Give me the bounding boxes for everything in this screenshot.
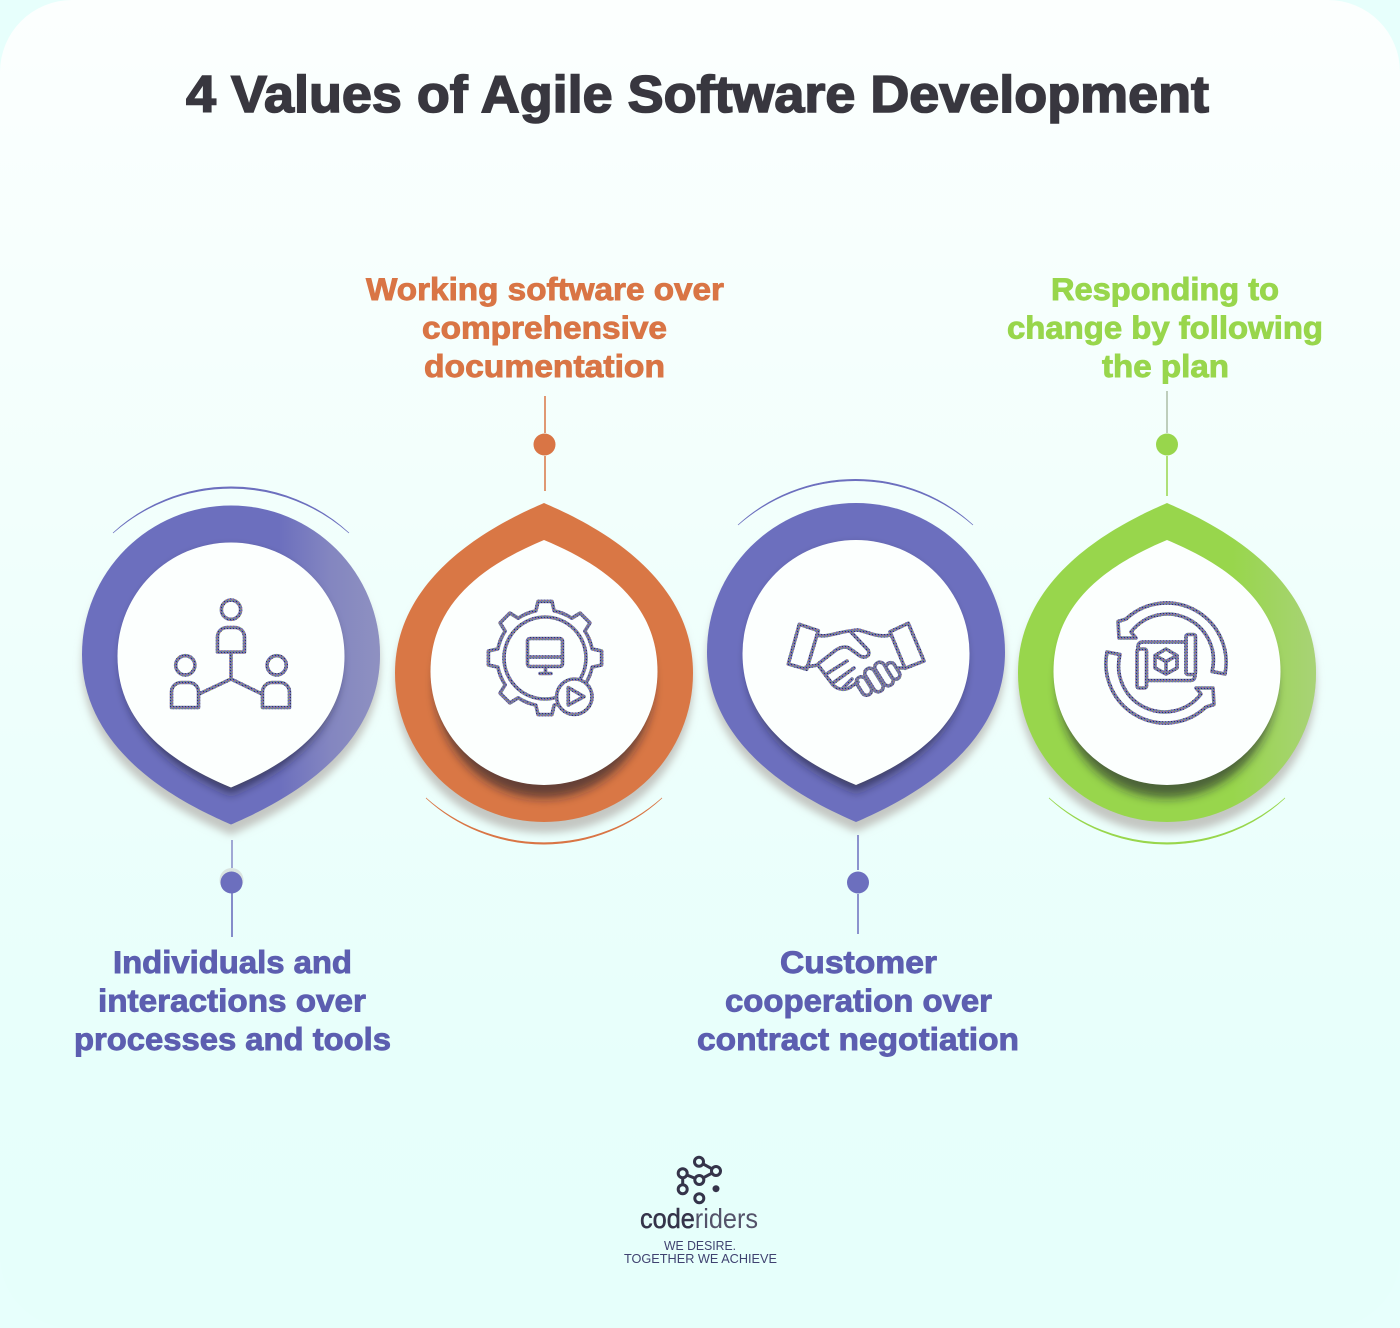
icon: people network	[172, 600, 290, 708]
label 2: comprehensive	[422, 310, 667, 346]
label 1: interactions over	[98, 982, 366, 1018]
label 3: cooperation over	[725, 982, 992, 1018]
white drop 3	[742, 540, 970, 785]
ring tint 4	[1018, 503, 1316, 822]
connector 2	[534, 396, 556, 491]
inner shadow 1	[122, 549, 340, 794]
logo mark	[678, 1157, 720, 1203]
label 2	[366, 271, 724, 384]
decorative arc above drop 3	[738, 479, 973, 525]
logo tagline: TOGETHER WE ACHIEVE	[624, 1252, 777, 1266]
label 1: processes and tools	[74, 1021, 391, 1057]
drop ring 4	[1018, 503, 1316, 822]
label 4	[1007, 271, 1323, 384]
inner shadow 4	[1051, 658, 1283, 805]
white drop 4	[1054, 540, 1280, 785]
title: 4 Values of Agile Software Development	[186, 66, 1209, 124]
panel: customer cooperation	[697, 479, 1019, 1057]
panel: responding to change	[1007, 271, 1323, 844]
drop shadow 3	[707, 513, 1005, 832]
decorative arc below drop 4	[1049, 798, 1285, 844]
label 2: documentation	[424, 348, 665, 384]
panel: individuals and interactions	[74, 487, 391, 1057]
label 1	[74, 944, 391, 1057]
connector 3	[847, 835, 869, 934]
drop ring 3	[707, 503, 1005, 822]
drop shadow 2	[395, 514, 693, 833]
connector 1	[220, 840, 244, 937]
logo tagline	[624, 1239, 777, 1266]
icon: handshake	[788, 623, 924, 697]
label 2: Working software over	[366, 271, 724, 307]
label 1: Individuals and	[113, 944, 352, 980]
connector 4	[1156, 391, 1178, 496]
drop shadow 1	[82, 516, 380, 835]
icon: cycle with blueprint and cube	[1106, 603, 1226, 723]
drop ring 1	[82, 506, 380, 824]
label 3: contract negotiation	[697, 1021, 1019, 1057]
label 3: Customer	[780, 944, 937, 980]
ring light tint 1	[82, 506, 380, 824]
panel: working software	[366, 271, 724, 844]
decorative arc below drop 2	[426, 798, 662, 844]
logo wordmark: coderiders	[640, 1203, 758, 1234]
label 3	[697, 944, 1019, 1057]
white drop 2	[430, 540, 658, 785]
drop shadow 4	[1018, 514, 1316, 833]
decorative arc above drop 1	[113, 487, 349, 533]
icon: gear with monitor and play	[488, 601, 602, 715]
inner shadow 2	[428, 655, 660, 806]
logo: coderiders	[624, 1157, 777, 1266]
label 4: Responding to	[1051, 271, 1279, 307]
white drop 1	[118, 543, 344, 788]
drop ring 2	[395, 503, 693, 822]
logo tagline: WE DESIRE.	[664, 1239, 736, 1253]
label 4: change by following	[1007, 310, 1323, 346]
label 4: the plan	[1102, 348, 1229, 384]
inner shadow 3	[747, 547, 965, 792]
